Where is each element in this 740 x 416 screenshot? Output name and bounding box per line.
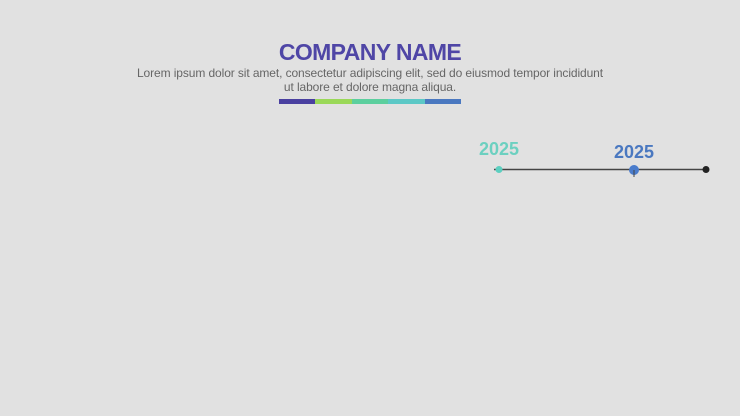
subtitle text: ut labore et dolore magna aliqua. (284, 80, 456, 94)
marker 2: 2025 (614, 142, 654, 162)
marker 2 (614, 142, 654, 177)
subtitle text: Lorem ipsum dolor sit amet, consectetur adipiscing elit, sed do eiusmod tempor incididunt (137, 66, 603, 80)
color bar (279, 99, 461, 104)
title: COMPANY NAME (279, 39, 461, 65)
subtitle text (137, 66, 603, 94)
marker 1 (479, 139, 519, 173)
end dot (702, 166, 710, 173)
marker 1: 2025 (479, 139, 519, 159)
